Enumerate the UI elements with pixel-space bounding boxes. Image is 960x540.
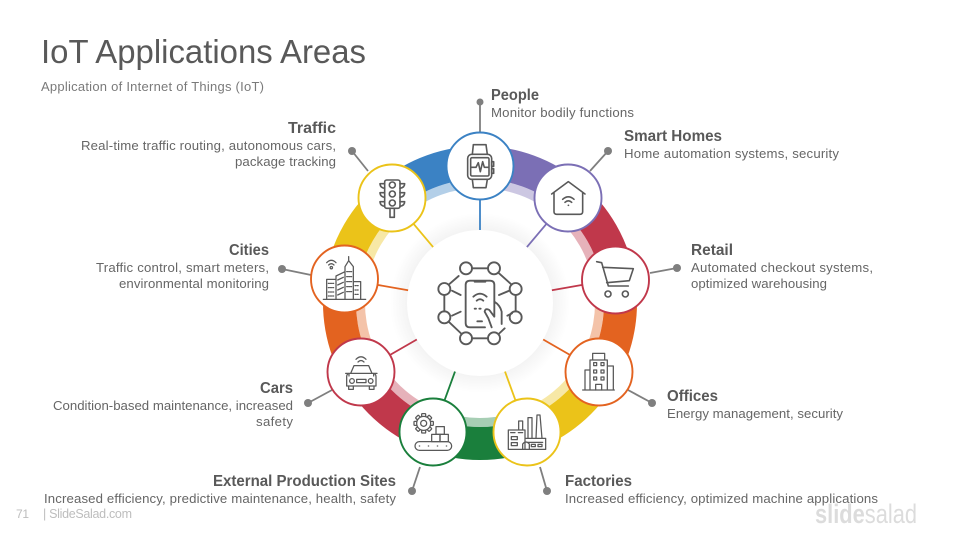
description: Offices: Energy management, security [667,406,843,421]
circle: Cars [328,338,394,406]
connector: External Production Sites [408,467,420,495]
spoke: Cars [390,340,417,355]
spoke: People [479,199,481,230]
spoke: External Production Sites [444,372,455,401]
node: Retail [552,242,873,314]
circle: Retail [582,246,649,314]
icon: conveyor and gear [414,414,452,450]
description: Cities [96,260,269,291]
center hub [390,213,570,393]
circle: People [446,132,514,200]
connector: Factories [540,467,551,495]
spoke: Retail [552,285,582,290]
footer site name: | SlideSalad.com [43,507,132,521]
circle: Offices [566,338,632,406]
description: Retail: optimized warehousing [691,276,827,291]
heading: Cars: Cars [260,380,293,397]
connector: Cars [304,390,332,407]
icon: shopping cart [597,262,633,297]
description: People: Monitor bodily functions [491,105,634,120]
icon: traffic light [380,180,405,217]
icon: office building [583,353,614,390]
subtitle: Application of Internet of Things (IoT) [41,79,264,94]
node: Smart Homes [527,128,839,247]
heading: Smart Homes: Smart Homes [624,128,722,145]
spoke: Smart Homes [527,223,547,247]
description: Cars: safety [256,414,293,429]
description: Cars: Condition-based maintenance, increased [53,398,293,413]
heading: Offices: Offices [667,388,718,405]
icon: smartphone network [438,262,522,344]
segmented ring [282,105,678,501]
icon: factory [508,415,546,449]
spoke: Offices [543,340,570,355]
description: Traffic [81,138,336,169]
description: Traffic: Real-time traffic routing, autonomous cars, [81,138,336,153]
heading: Cities: Cities [229,242,269,259]
circle: Smart Homes [534,164,602,232]
description: Smart Homes: Home automation systems, security [624,146,839,161]
connector: Traffic [348,147,368,171]
heading: People: People [491,87,539,104]
description: Traffic: package tracking [235,154,336,169]
icon: smart city [323,257,366,299]
circle: External Production Sites [400,398,466,466]
description: Retail: Automated checkout systems, [691,260,873,275]
connector: Retail [650,264,681,273]
circle: Factories [494,398,560,466]
connector: Offices [628,390,656,407]
node: Cities [96,242,408,312]
logo: slidesalad [815,499,917,529]
icon: smartwatch [468,145,494,188]
heading: Factories: Factories [565,473,632,490]
description: Cars [53,398,293,429]
circle: Cities [311,246,378,312]
node: External Production Sites [44,372,466,506]
node: Offices [543,338,843,421]
page number: 71 [16,507,29,521]
icon: smart home [552,182,585,214]
title: IoT Applications Areas [41,33,366,70]
node: Cars [53,338,417,429]
node: Factories [494,372,878,506]
icon: connected car [346,357,377,389]
heading: External Production Sites: External Production Sites [213,473,396,490]
connector: People [476,98,484,133]
spoke: Factories [505,372,516,401]
description: Cities: environmental monitoring [119,276,269,291]
description: Factories: Increased efficiency, optimized machine applications [565,491,878,506]
description: External Production Sites: Increased efficiency, predictive maintenance, health, safety [44,491,396,506]
spoke: Cities [378,285,408,290]
spoke: Traffic [413,223,433,247]
heading: Retail: Retail [691,242,733,259]
connector: Smart Homes [590,147,612,171]
description: Retail [691,260,873,291]
heading: Traffic: Traffic [288,120,336,137]
description: Cities: Traffic control, smart meters, [96,260,269,275]
connector: Cities [278,265,311,275]
circle: Traffic [358,164,426,232]
node: People [446,87,634,230]
node: Traffic [81,120,433,247]
